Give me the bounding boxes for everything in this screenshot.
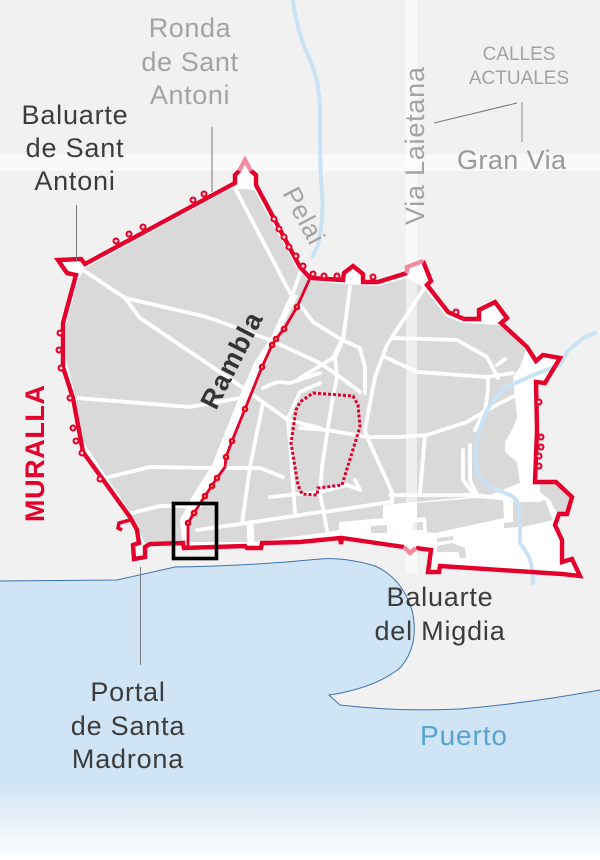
label: Baluarte del Migdia: del Migdia xyxy=(374,616,506,646)
label: Baluarte de Sant Antoni: Antoni xyxy=(34,166,116,196)
locator box: Portal de Santa Madrona xyxy=(174,504,216,558)
label: Ronda de Sant Antoni: Ronda xyxy=(149,13,232,43)
label: Muralla: MURALLA xyxy=(20,385,50,522)
label: Ronda de Sant Antoni: Antoni xyxy=(150,80,230,110)
current streets: Via Laietana and Gran Via bands xyxy=(0,0,600,573)
grey blocks xyxy=(66,188,570,558)
sea xyxy=(0,559,600,860)
white streets xyxy=(77,188,540,541)
city wall xyxy=(58,170,580,576)
label: Calles actuales: CALLES xyxy=(483,44,555,65)
small bastion hook xyxy=(118,520,130,530)
label: Calles actuales: ACTUALES xyxy=(469,68,569,89)
Rambla wall line xyxy=(188,278,310,548)
label: Portal de Santa Madrona: Portal xyxy=(90,677,166,707)
label: Portal de Santa Madrona: de Santa xyxy=(71,711,185,741)
label: Rambla: Rambla xyxy=(195,307,269,414)
rivers xyxy=(293,0,597,585)
Rambla boulevard xyxy=(180,293,298,540)
label: Baluarte de Sant Antoni: de Sant xyxy=(26,133,124,163)
label: Gran Via: Gran Via xyxy=(457,145,567,175)
leader lines xyxy=(76,102,522,665)
wall towers xyxy=(56,192,544,482)
demolished wall sections xyxy=(239,160,423,553)
label: Puerto: Puerto xyxy=(420,720,507,751)
label: Via Laietana: Via Laietana xyxy=(400,66,430,225)
towers along Rambla xyxy=(186,305,299,525)
label: Baluarte del Migdia: Baluarte xyxy=(387,582,493,612)
old Roman wall dotted xyxy=(291,393,360,495)
label: Ronda de Sant Antoni: de Sant xyxy=(141,47,239,77)
label: Baluarte de Sant Antoni: Baluarte xyxy=(22,100,128,130)
label: Pelai: Pelai xyxy=(277,182,332,250)
city walled area xyxy=(58,167,580,576)
label: Portal de Santa Madrona: Madrona xyxy=(72,744,184,774)
